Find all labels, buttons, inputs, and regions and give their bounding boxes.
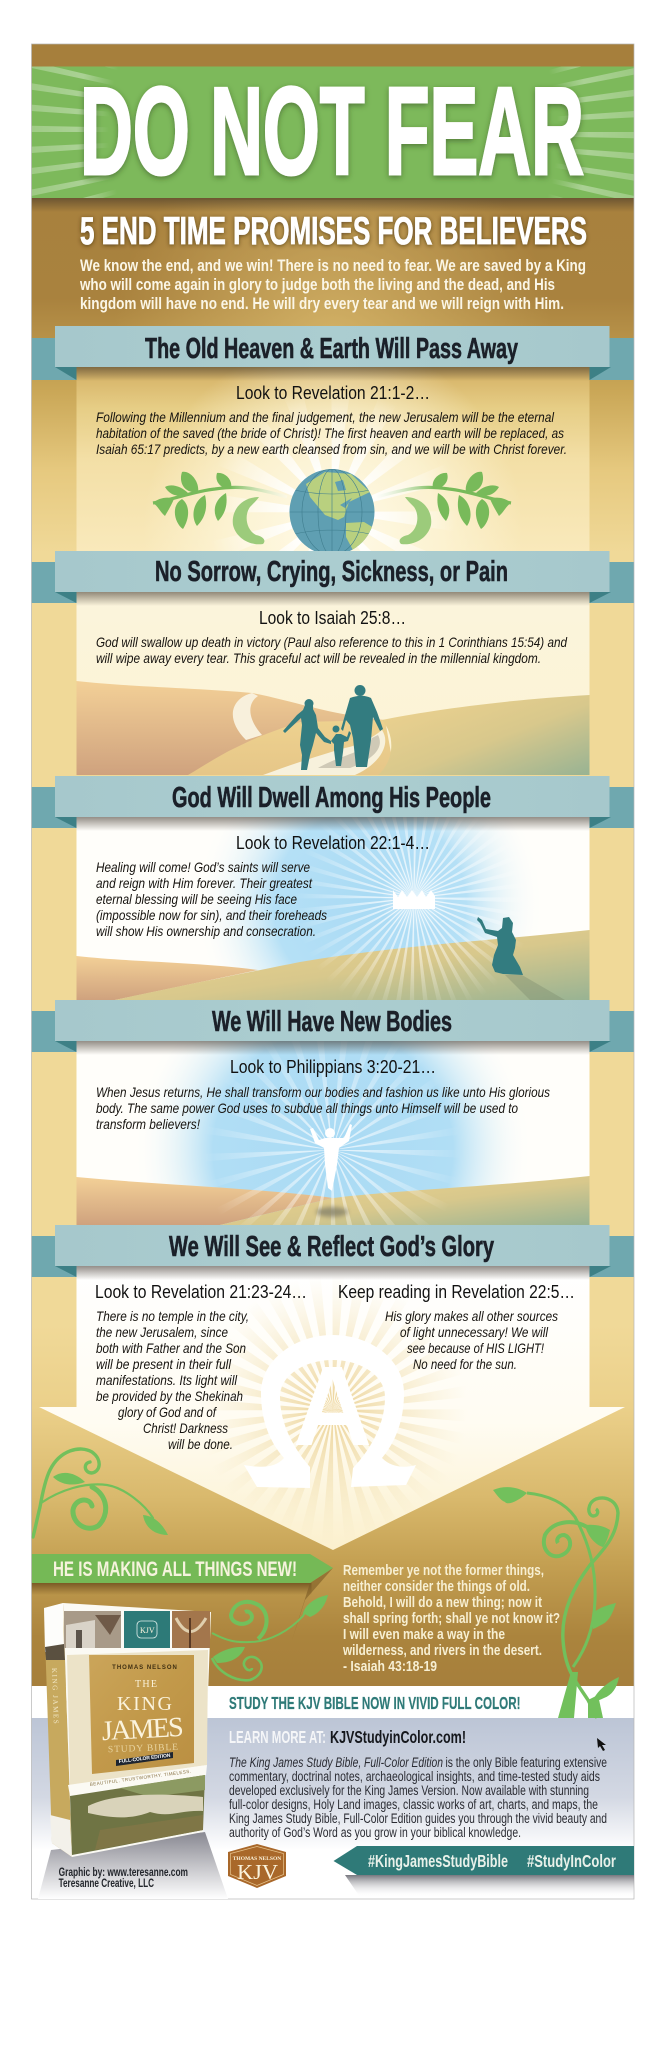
body text: (impossible now for sin), and their foreheads	[96, 908, 327, 923]
body text right	[385, 1309, 558, 1372]
book cover text: JAMES	[101, 1712, 184, 1747]
centre glow behind intro	[32, 200, 634, 400]
book cover text: THOMAS NELSON	[112, 1665, 178, 1671]
panel: old heaven and earth	[76, 367, 590, 551]
credit text: Graphic by: www.teresanne.com	[59, 1865, 188, 1879]
body text	[96, 635, 568, 666]
website link: KJVStudyinColor.com!	[330, 1727, 466, 1747]
ribbon heading: We Will Have New Bodies	[212, 1006, 452, 1038]
book cover text: KING	[117, 1693, 172, 1715]
light rays around figure	[267, 1085, 397, 1215]
icon: right vine	[493, 1487, 619, 1718]
body text	[96, 1085, 550, 1132]
icon: left vine	[33, 1449, 168, 1537]
ribbon 2	[32, 551, 634, 603]
ribbon 1	[32, 326, 634, 380]
body text left	[96, 1309, 249, 1452]
body text: will show His ownership and consecration.	[96, 924, 316, 939]
study heading: STUDY THE KJV BIBLE NOW IN VIVID FULL COLOR!	[229, 1693, 520, 1713]
ribbon heading: God Will Dwell Among His People	[172, 782, 491, 814]
body text left: There is no temple in the city,	[96, 1309, 249, 1324]
panel: see and reflect glory	[39, 1266, 625, 1550]
icon: Bible book	[44, 1603, 211, 1857]
icon: kneeling figure	[477, 917, 565, 1000]
hashtag two: #StudyInColor	[527, 1851, 616, 1871]
book cover text: THE	[135, 1679, 157, 1690]
landscape: hills	[76, 1176, 590, 1225]
book shadow	[38, 1832, 228, 1899]
panel: god will dwell	[76, 817, 590, 1000]
credit text: Teresanne Creative, LLC	[59, 1876, 154, 1890]
landscape: hills and road	[76, 681, 590, 775]
body text: When Jesus returns, He shall transform our bodies and fashion us like unto His glorious	[96, 1085, 550, 1100]
body text: Healing will come! God’s saints will serve	[96, 860, 310, 875]
verse text: - Isaiah 43:18-19	[343, 1659, 437, 1675]
scripture reference left: Look to Revelation 21:23-24…	[95, 1281, 307, 1302]
body text left: will be done.	[168, 1437, 233, 1452]
icon: Bible book: KJV	[140, 1626, 155, 1635]
banner: he is making all things new	[32, 1554, 333, 1640]
book cover text: FULL-COLOR EDITION	[119, 1753, 171, 1765]
verse text: wilderness, and rivers in the desert.	[342, 1643, 542, 1659]
body text: Isaiah 65:17 predicts, by a new earth cleansed from sin, and we will be with Christ forever.	[96, 442, 567, 457]
body text left: Christ! Darkness	[143, 1421, 228, 1436]
verse text	[342, 1563, 560, 1675]
sun rays behind globe	[270, 450, 394, 574]
verse text: I will even make a way in the	[343, 1627, 505, 1643]
description text	[229, 1755, 607, 1840]
icon: crown	[393, 890, 435, 909]
icon: KJV badge: THOMAS NELSON	[233, 1856, 281, 1862]
body text right: No need for the sun.	[413, 1357, 517, 1372]
icon: right laurel branch	[377, 472, 511, 544]
scripture reference: Look to Philippians 3:20-21…	[230, 1056, 436, 1077]
ribbon 4	[32, 1000, 634, 1052]
verse text: Behold, I will do a new thing; now it	[343, 1595, 542, 1611]
hashtag banner shadow	[345, 1875, 634, 1897]
scripture reference: Look to Revelation 22:1-4…	[236, 832, 430, 853]
scripture reference: Look to Isaiah 25:8…	[259, 607, 406, 628]
header band	[32, 66, 634, 210]
sun rays around crown	[354, 838, 474, 958]
ribbon heading: We Will See & Reflect God’s Glory	[169, 1231, 494, 1263]
verse text: Remember ye not the former things,	[343, 1563, 544, 1579]
body text left: the new Jerusalem, since	[96, 1325, 228, 1340]
body text left: manifestations. Its light will	[96, 1373, 238, 1388]
body text: eternal blessing will be seeing His face	[96, 892, 297, 907]
spine text: KING JAMES	[50, 1668, 60, 1725]
body text right: His glory makes all other sources	[385, 1309, 558, 1324]
icon: KJV badge	[228, 1844, 286, 1888]
icon: cursor	[597, 1738, 606, 1751]
glory rays	[265, 1342, 401, 1478]
icon: small vine by book	[212, 1595, 328, 1680]
banner text: HE IS MAKING ALL THINGS NEW!	[53, 1558, 297, 1581]
hashtag banner	[334, 1846, 634, 1875]
body text: body. The same power God uses to subdue all things unto Himself will be used to	[96, 1101, 518, 1116]
description text: The King James Study Bible, Full-Color Edition	[229, 1755, 443, 1770]
body text	[96, 860, 327, 939]
scripture reference: Look to Revelation 21:1-2…	[236, 382, 430, 403]
body text right: of light unnecessary! We will	[400, 1325, 549, 1340]
learn more label: LEARN MORE AT:	[229, 1727, 326, 1747]
credit text	[59, 1865, 188, 1890]
body text left: glory of God and of	[118, 1405, 218, 1420]
body text right: see because of HIS LIGHT!	[407, 1341, 544, 1356]
intro text	[79, 256, 586, 313]
icon: alpha symbol: A	[293, 1343, 372, 1469]
panel: new bodies	[76, 1041, 590, 1225]
body text left: be provided by the Shekinah	[96, 1389, 243, 1404]
body text: God will swallow up death in victory (Paul also reference to this in 1 Corinthians 15:54) and	[96, 635, 568, 650]
glow around crown	[380, 864, 448, 932]
body text	[96, 410, 567, 457]
body text: Following the Millennium and the final judgement, the new Jerusalem will be the eternal	[96, 410, 555, 425]
icon: KJV badge: KJV	[237, 1860, 278, 1884]
intro text: who will come again in glory to judge both the living and the dead, and His	[79, 275, 555, 294]
ribbon 5	[32, 1225, 634, 1277]
intro text: kingdom will have no end. He will dry every tear and we will reign with Him.	[80, 294, 564, 313]
body text left: both with Father and the Son	[96, 1341, 246, 1356]
description text: is the only Bible featuring extensive	[446, 1755, 607, 1770]
icon: globe	[289, 469, 375, 555]
landscape: hills	[76, 930, 590, 1000]
body text: will wipe away every tear. This graceful act will be revealed in the millennial kingdom.	[96, 651, 541, 666]
description text: authority of God’s Word as you grow in your biblical knowledge.	[229, 1825, 521, 1840]
icon: omega symbol	[244, 1335, 416, 1488]
book cover text	[68, 1665, 207, 1796]
panel background	[32, 44, 634, 1686]
body text left: will be present in their full	[96, 1357, 232, 1372]
ribbon heading: No Sorrow, Crying, Sickness, or Pain	[155, 556, 508, 588]
scripture reference right: Keep reading in Revelation 22:5…	[338, 1281, 575, 1302]
book cover text: BEAUTIFUL. TRUSTWORTHY. TIMELESS.	[89, 1769, 191, 1787]
verse text: shall spring forth; shall ye not know it?	[343, 1611, 560, 1627]
icon: family silhouette	[283, 685, 383, 770]
icon: left laurel branch	[153, 472, 287, 544]
panel: no sorrow	[76, 592, 590, 775]
verse text: neither consider the things of old.	[343, 1579, 530, 1595]
body text: transform believers!	[96, 1117, 200, 1132]
downward arrow	[39, 1266, 625, 1550]
ribbon 3	[32, 776, 634, 828]
hashtag one: #KingJamesStudyBible	[368, 1851, 508, 1871]
body text: and reign with Him forever. Their greatest	[96, 876, 313, 891]
body text: habitation of the saved (the bride of Christ)! The first heaven and earth will be replaced, as	[96, 426, 564, 441]
icon: risen figure	[310, 1124, 352, 1217]
book cover text: STUDY BIBLE	[108, 1743, 178, 1755]
